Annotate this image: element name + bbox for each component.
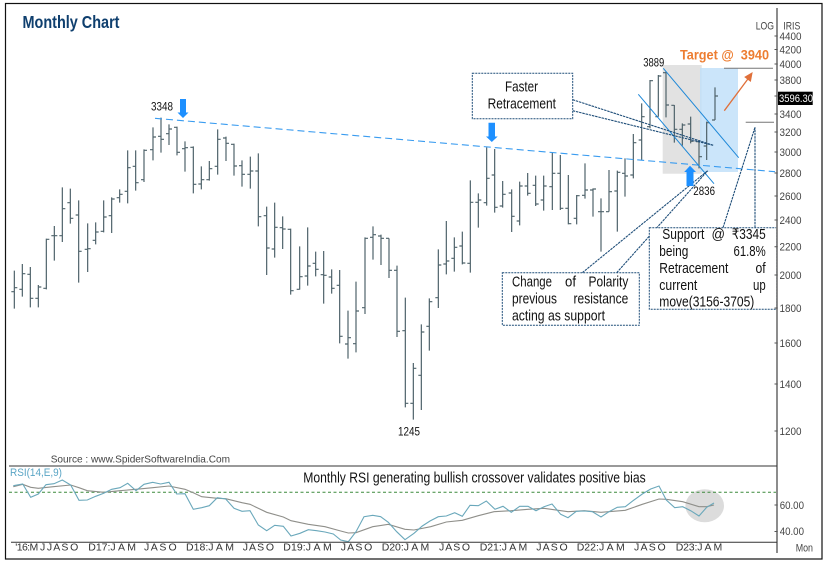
time axis labels: D21:J A M <box>480 542 527 554</box>
time axis labels: D18:J A M <box>186 542 234 554</box>
price axis: 3200 <box>780 127 802 139</box>
callout: change of polarity: of <box>565 275 577 291</box>
callout: faster retracement: Faster <box>505 79 538 96</box>
price axis: LOG <box>756 20 774 32</box>
callout: support at 3345: being <box>659 244 688 260</box>
price axis: 3400 <box>780 109 802 121</box>
callout: support at 3345: 61.8% <box>734 244 766 260</box>
arrow: down at 3348 high <box>178 99 188 118</box>
callout leader lines <box>573 100 755 273</box>
callout: faster retracement: Retracement <box>488 95 557 112</box>
price axis: 2800 <box>780 168 802 180</box>
title: Monthly Chart <box>22 12 120 32</box>
price axis: Mon <box>796 543 813 555</box>
price axis: 2200 <box>780 242 802 254</box>
label 3348: 3348 <box>151 100 173 114</box>
price axis: 1600 <box>780 338 802 350</box>
callout: support at 3345: @ <box>712 227 725 243</box>
price axis: 40.00 <box>780 526 804 538</box>
callout: support at 3345 <box>649 227 777 311</box>
last price tag: 3596.30 <box>779 93 813 105</box>
callout: support at 3345: of <box>756 261 767 277</box>
label 1245: 1245 <box>398 424 420 438</box>
price axis: 1200 <box>780 426 802 438</box>
price axis: 4200 <box>780 44 802 56</box>
price axis: IRIS <box>783 20 800 32</box>
label 2836: 2836 <box>693 184 715 198</box>
time axis labels: D20:J A M <box>382 542 429 554</box>
shaded zone: consolidation <box>663 65 702 174</box>
time axis labels: D19:J A M <box>283 542 332 554</box>
arrow: down at 2021 high <box>486 123 498 142</box>
label 3889: 3889 <box>643 56 665 70</box>
target label: Target @ 3940 <box>680 46 769 62</box>
price axis: 2400 <box>780 215 802 227</box>
callout: change of polarity: acting as support <box>512 309 605 325</box>
callout: change of polarity: previous <box>512 292 557 308</box>
time axis line <box>11 541 777 543</box>
time axis labels <box>15 542 722 554</box>
RSI commentary: Monthly RSI generating bullish crossover validates positive bias <box>303 470 646 487</box>
arrow: upward to target <box>724 72 753 111</box>
price axis: 1800 <box>780 303 802 315</box>
source note: Source : www.SpiderSoftwareIndia.Com <box>51 454 230 466</box>
price axis: 1400 <box>780 379 802 391</box>
time axis labels: J A S O <box>439 542 470 554</box>
RSI main line <box>13 480 714 542</box>
RSI signal line <box>13 484 714 533</box>
price axis: 2000 <box>780 270 802 282</box>
RSI chart <box>13 480 714 542</box>
time axis labels: J A S O <box>243 542 274 554</box>
price axis: 60.00 <box>780 500 804 512</box>
price axis: 3800 <box>780 75 802 87</box>
callout: support at 3345: current <box>659 278 697 294</box>
time axis labels: D22:J A M <box>577 542 625 554</box>
price axis: 4000 <box>780 59 802 71</box>
price axis: 2600 <box>780 191 802 203</box>
time axis labels: J A S O <box>634 542 666 554</box>
price bars 2022 <box>549 152 620 252</box>
dashed long-term trendline <box>155 118 775 172</box>
arrow: up at 2836 low <box>684 166 696 186</box>
callout: change of polarity: Polarity <box>588 275 629 291</box>
RSI reference level <box>9 491 776 493</box>
target level line <box>724 67 773 69</box>
RSI label: RSI(14,E,9) <box>10 467 62 479</box>
price bars 2016 to 2018 <box>11 118 270 309</box>
RSI highlight ellipse <box>685 489 724 522</box>
callout: change of polarity <box>502 273 639 325</box>
RSI panel divider <box>9 465 777 467</box>
callout: support at 3345: ₹3345 <box>732 227 766 243</box>
time axis labels: J A S O <box>536 542 568 554</box>
callout: support at 3345: Retracement <box>659 261 728 277</box>
time axis labels: J A S O <box>144 542 177 554</box>
callout: support at 3345: Support <box>662 227 704 243</box>
price axis <box>756 8 813 555</box>
callout: change of polarity: resistance <box>574 292 628 308</box>
callout: faster retracement <box>472 73 573 119</box>
support level line <box>746 121 774 123</box>
callout: support at 3345: up <box>753 278 766 294</box>
time axis labels: J A S O <box>341 542 372 554</box>
price bars 2022 to 2023 <box>622 72 718 197</box>
callout: change of polarity: Change <box>512 275 552 291</box>
price axis: 3000 <box>780 147 802 159</box>
shaded zone: projected move <box>700 68 738 172</box>
time axis labels: D23:J A M <box>676 542 722 554</box>
falling channel lines <box>638 68 739 184</box>
time axis labels: '16:M J J A S O <box>15 542 78 554</box>
time axis labels: D17:J A M <box>88 542 136 554</box>
price bars 2019 to 2022 <box>272 147 547 420</box>
price axis: 4400 <box>780 31 802 43</box>
callout: support at 3345: move(3156-3705) <box>659 295 754 311</box>
